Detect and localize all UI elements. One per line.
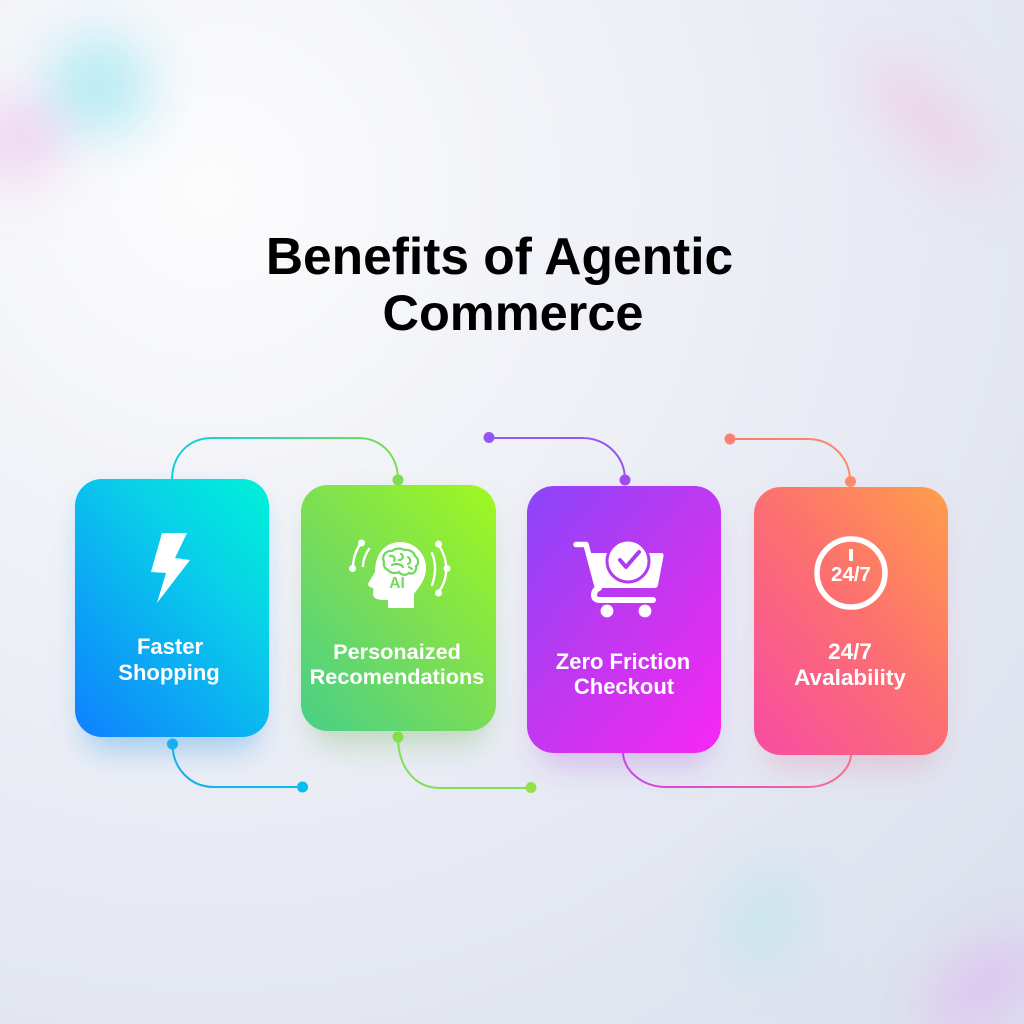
- connector: Personalized bottom: [392, 732, 536, 793]
- label: Faster Shopping: Faster: [137, 634, 203, 659]
- card: Personalized Recomendations: [301, 485, 496, 731]
- title: [266, 227, 733, 341]
- label: Personalized Recomendations: Personaized: [333, 639, 461, 664]
- icon: AI head with brain: [349, 540, 450, 608]
- icon: shopping cart with check: [576, 540, 664, 617]
- connector: Faster Shopping bottom: [167, 738, 308, 792]
- label: Zero Friction Checkout: [556, 649, 690, 699]
- card: 24/7 Availability: [754, 487, 948, 755]
- connector: Checkout bottom to Availability: [623, 752, 851, 787]
- card: Faster Shopping: [75, 479, 269, 737]
- label: Personalized Recomendations: Recomendations: [310, 664, 484, 689]
- title: Benefits of Agentic: [266, 227, 733, 285]
- label: 24/7 Availability: 24/7: [828, 639, 872, 664]
- card: Zero Friction Checkout: [527, 486, 721, 753]
- card shadows: [83, 495, 940, 769]
- label: Zero Friction Checkout: Checkout: [574, 674, 675, 699]
- icon: lightning bolt: [151, 533, 190, 603]
- brain: [383, 549, 418, 575]
- icon: 24/7 clock: [817, 539, 885, 607]
- label: Personalized Recomendations: [310, 639, 484, 689]
- label: 24/7 Availability: Avalability: [794, 665, 906, 690]
- connector: Zero Friction top: [484, 432, 630, 486]
- label: Zero Friction Checkout: Zero Friction: [556, 649, 690, 674]
- icon: 24/7 clock: 24/7: [831, 563, 871, 586]
- icon: AI head with brain: AI: [389, 575, 405, 592]
- label: Faster Shopping: [118, 634, 220, 685]
- label: Faster Shopping: Shopping: [118, 660, 220, 685]
- label: 24/7 Availability: [794, 639, 906, 690]
- title: Commerce: [382, 284, 644, 341]
- connector: Faster Shopping top to Personalized: [172, 438, 404, 486]
- signal arcs: [353, 543, 446, 593]
- connector: Availability top: [724, 434, 856, 487]
